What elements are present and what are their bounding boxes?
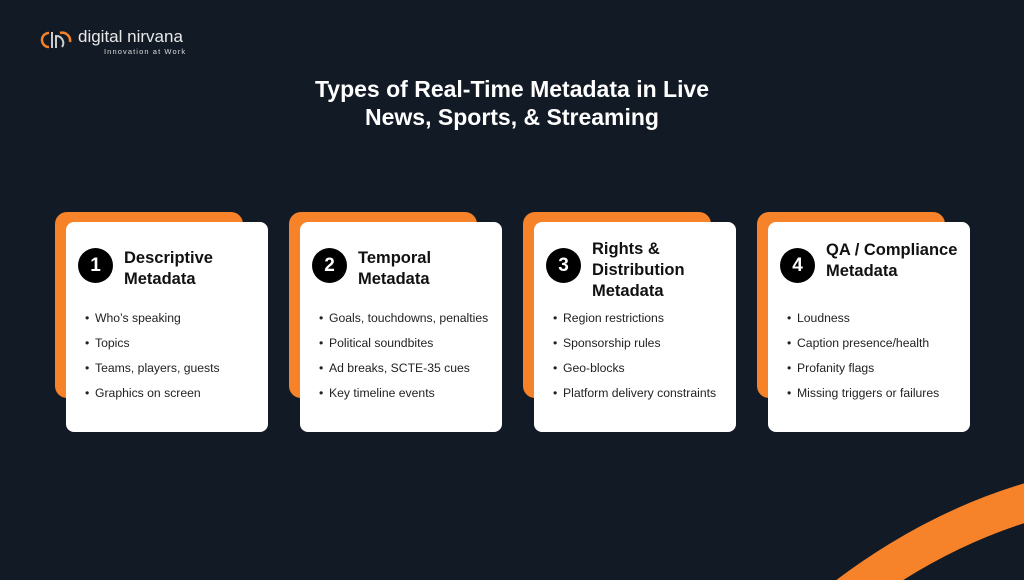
logo: Innovation at Work	[104, 47, 186, 56]
text: Key timeline events	[329, 386, 435, 400]
text: Metadata	[826, 262, 898, 280]
text: 4	[792, 255, 803, 276]
text: Geo-blocks	[563, 361, 625, 375]
text: Region restrictions	[563, 311, 664, 325]
text: 2	[324, 255, 335, 276]
text: Who’s speaking	[95, 311, 181, 325]
text: Ad breaks, SCTE-35 cues	[329, 361, 470, 375]
text: Platform delivery constraints	[563, 386, 716, 400]
text: Political soundbites	[329, 336, 433, 350]
text: Metadata	[358, 270, 430, 288]
panel: descriptive	[55, 212, 243, 398]
text: Goals, touchdowns, penalties	[329, 311, 488, 325]
text: 1	[90, 255, 101, 276]
text: Profanity flags	[797, 361, 874, 375]
text: Descriptive	[124, 249, 213, 267]
text: 3	[558, 255, 569, 276]
icon: logo mark	[40, 31, 72, 48]
text: Temporal	[358, 249, 431, 267]
text: Caption presence/health	[797, 336, 929, 350]
text: QA / Compliance	[826, 241, 957, 259]
text: Topics	[95, 336, 130, 350]
text: Sponsorship rules	[563, 336, 661, 350]
text: Loudness	[797, 311, 850, 325]
panel: temporal	[289, 212, 477, 398]
text: Graphics on screen	[95, 386, 201, 400]
text: Distribution	[592, 261, 685, 279]
text: Metadata	[124, 270, 196, 288]
title: Types of Real-Time Metadata in Live	[315, 76, 709, 102]
logo	[40, 27, 186, 56]
title: News, Sports, & Streaming	[365, 104, 659, 130]
text: Teams, players, guests	[95, 361, 220, 375]
panel: rights	[523, 212, 711, 398]
text: Missing triggers or failures	[797, 386, 939, 400]
title	[315, 76, 709, 130]
logo: digital nirvana	[78, 27, 183, 46]
panel: QA	[757, 212, 945, 398]
text: Metadata	[592, 282, 664, 300]
text: Rights &	[592, 240, 660, 258]
